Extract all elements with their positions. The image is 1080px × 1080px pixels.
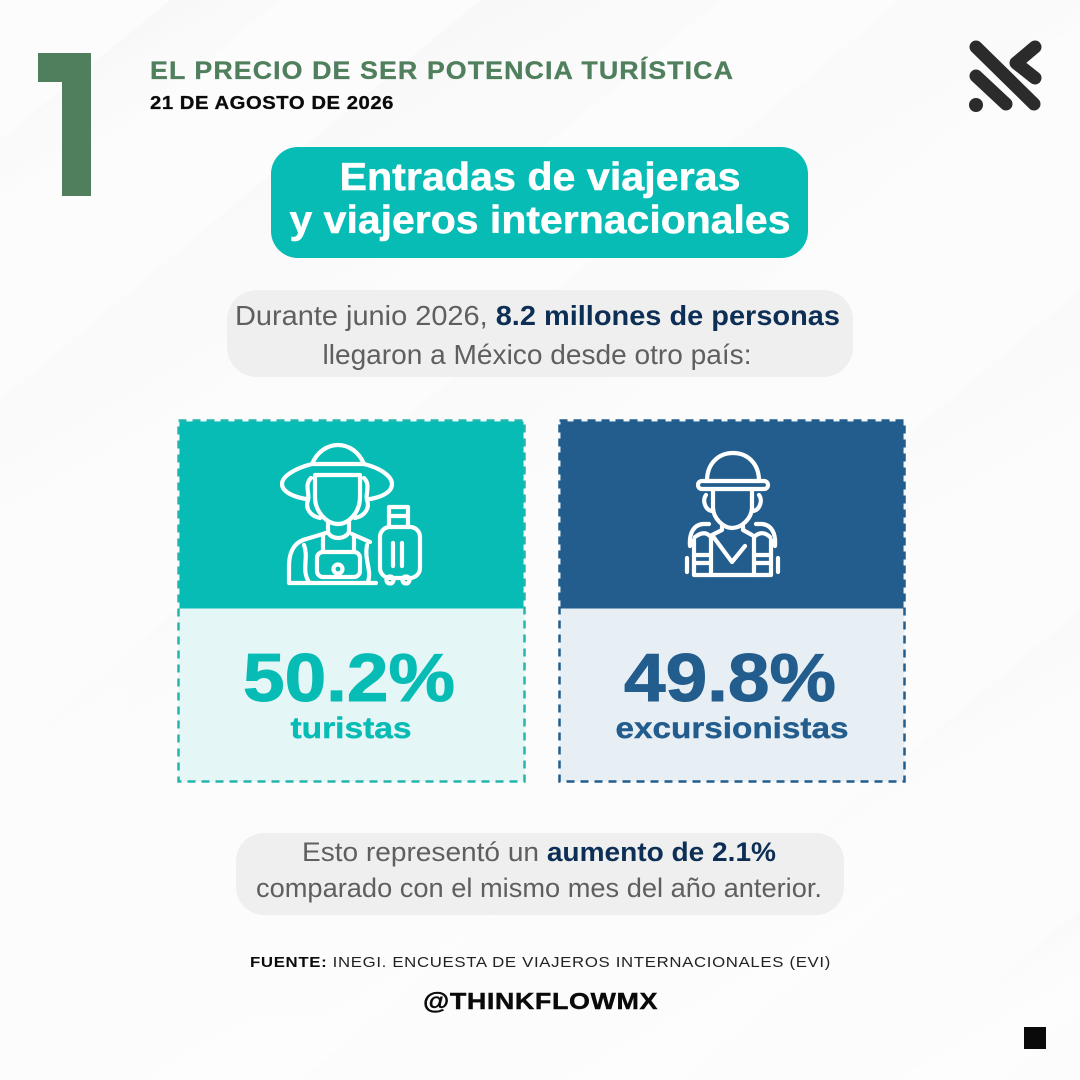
icon: woman tourist with suitcase [282,445,420,584]
panel: excursionistas [560,420,904,782]
heading panel: y viajeros internacionales [290,199,790,242]
icon: hiker with backpack [687,453,778,575]
heading panel: Entradas de viajeras [340,156,740,199]
callout: increase [236,833,844,915]
intro text block: Durante junio 2026, 8.2 millones de personas [235,300,840,331]
heading panel [271,147,808,258]
intro text block [227,290,853,377]
figure: 50.2%: 50.2% [243,640,455,716]
social handle: @THINKFLOWMX [423,988,658,1014]
icon: brand logo [969,47,1035,112]
corner square [1024,1027,1046,1049]
date: 21 DE AGOSTO DE 2026 [150,92,394,113]
figure: 49.8%: 49.8% [624,640,836,716]
label: turistas: turistas [290,712,412,745]
source note: FUENTE: INEGI. ENCUESTA DE VIAJEROS INTERNACIONALES (EVI) [250,954,831,971]
title: header: EL PRECIO DE SER POTENCIA TURÍSTICA [150,56,734,85]
callout: increase: Esto representó un aumento de 2.1% [302,837,776,867]
panel: turistas [178,420,524,782]
intro text block: llegaron a México desde otro país: [322,339,752,370]
large number 1 [38,53,91,196]
label: excursionistas: excursionistas [616,712,848,745]
callout: increase: comparado con el mismo mes del año anterior. [256,873,822,903]
